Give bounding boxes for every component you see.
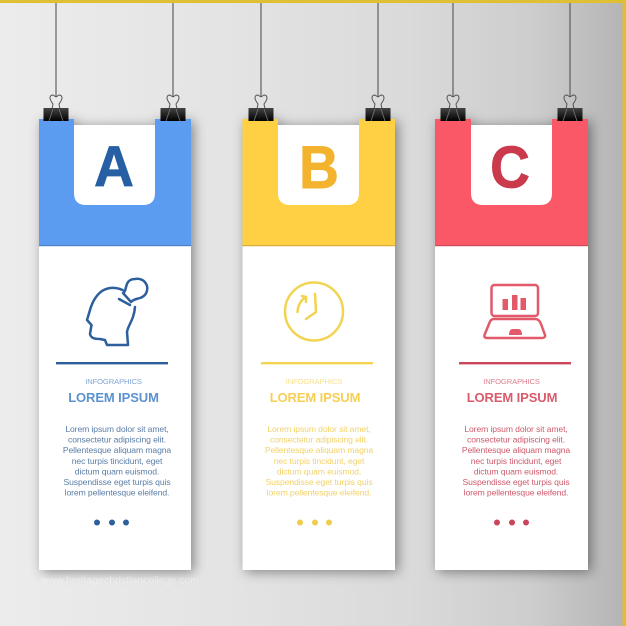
- hanging strings B: [261, 3, 378, 97]
- paper B: [242, 119, 395, 570]
- text block A: consectetur adipiscing elit.: [68, 434, 166, 444]
- divider B: [261, 362, 373, 364]
- dots C: [494, 520, 529, 526]
- watermark: www.heritagechristiancollege.com: [40, 574, 199, 586]
- icon: laptop with chart: [484, 285, 545, 338]
- header band A: [39, 119, 191, 246]
- text block C: lorem pellentesque eleifend.: [464, 488, 568, 498]
- heading A: INFOGRAPHICS: [85, 377, 142, 386]
- text block B: [265, 424, 373, 498]
- letter A: A: [94, 134, 134, 198]
- dots B: [297, 520, 332, 526]
- text block B: consectetur adipiscing elit.: [270, 434, 368, 444]
- text block A: dictum quam euismod.: [75, 466, 159, 476]
- divider A: [56, 362, 168, 364]
- icon: clock: [285, 282, 343, 340]
- text block C: Lorem ipsum dolor sit amet,: [464, 424, 568, 434]
- binder clips B: [248, 95, 390, 121]
- text block A: lorem pellentesque eleifend.: [65, 488, 169, 498]
- text block B: lorem pellentesque eleifend.: [267, 488, 371, 498]
- heading C: LOREM IPSUM: [467, 390, 557, 405]
- hanging strings A: [56, 3, 173, 97]
- panel: card A: [39, 3, 191, 570]
- hanging strings C: [453, 3, 570, 97]
- divider C: [459, 362, 571, 364]
- text block C: dictum quam euismod.: [474, 466, 558, 476]
- icon: head with light bulb: [87, 279, 147, 345]
- header band C: [435, 119, 588, 246]
- binder clips C: [440, 95, 582, 121]
- heading B: [270, 377, 360, 405]
- text block A: Suspendisse eget turpis quis: [63, 477, 171, 487]
- header band B: [242, 119, 395, 246]
- text block B: Suspendisse eget turpis quis: [265, 477, 373, 487]
- paper A: [39, 119, 191, 570]
- dots A: [94, 520, 129, 526]
- letter C: C: [490, 135, 530, 201]
- text block B: nec turpis tincidunt, eget: [274, 456, 365, 466]
- heading B: LOREM IPSUM: [270, 390, 360, 405]
- panel: card B: [242, 3, 395, 570]
- binder clips A: [44, 95, 186, 121]
- text block B: Lorem ipsum dolor sit amet,: [267, 424, 371, 434]
- text block C: consectetur adipiscing elit.: [467, 434, 565, 444]
- text block A: Lorem ipsum dolor sit amet,: [65, 424, 169, 434]
- text block C: Pellentesque aliquam magna: [462, 445, 570, 455]
- text block B: dictum quam euismod.: [277, 466, 361, 476]
- text block A: [63, 424, 171, 498]
- paper C: [435, 119, 588, 570]
- text block C: [462, 424, 570, 498]
- heading C: [467, 377, 557, 405]
- text block A: nec turpis tincidunt, eget: [72, 456, 163, 466]
- text block B: Pellentesque aliquam magna: [265, 445, 373, 455]
- letter B: B: [299, 135, 339, 202]
- heading C: INFOGRAPHICS: [483, 377, 540, 386]
- heading B: INFOGRAPHICS: [286, 377, 342, 386]
- panel: card C: [435, 3, 588, 570]
- heading A: LOREM IPSUM: [68, 390, 159, 405]
- text block A: Pellentesque aliquam magna: [63, 445, 171, 455]
- text block C: nec turpis tincidunt, eget: [471, 456, 562, 466]
- text block C: Suspendisse eget turpis quis: [462, 477, 570, 487]
- heading A: [68, 377, 159, 405]
